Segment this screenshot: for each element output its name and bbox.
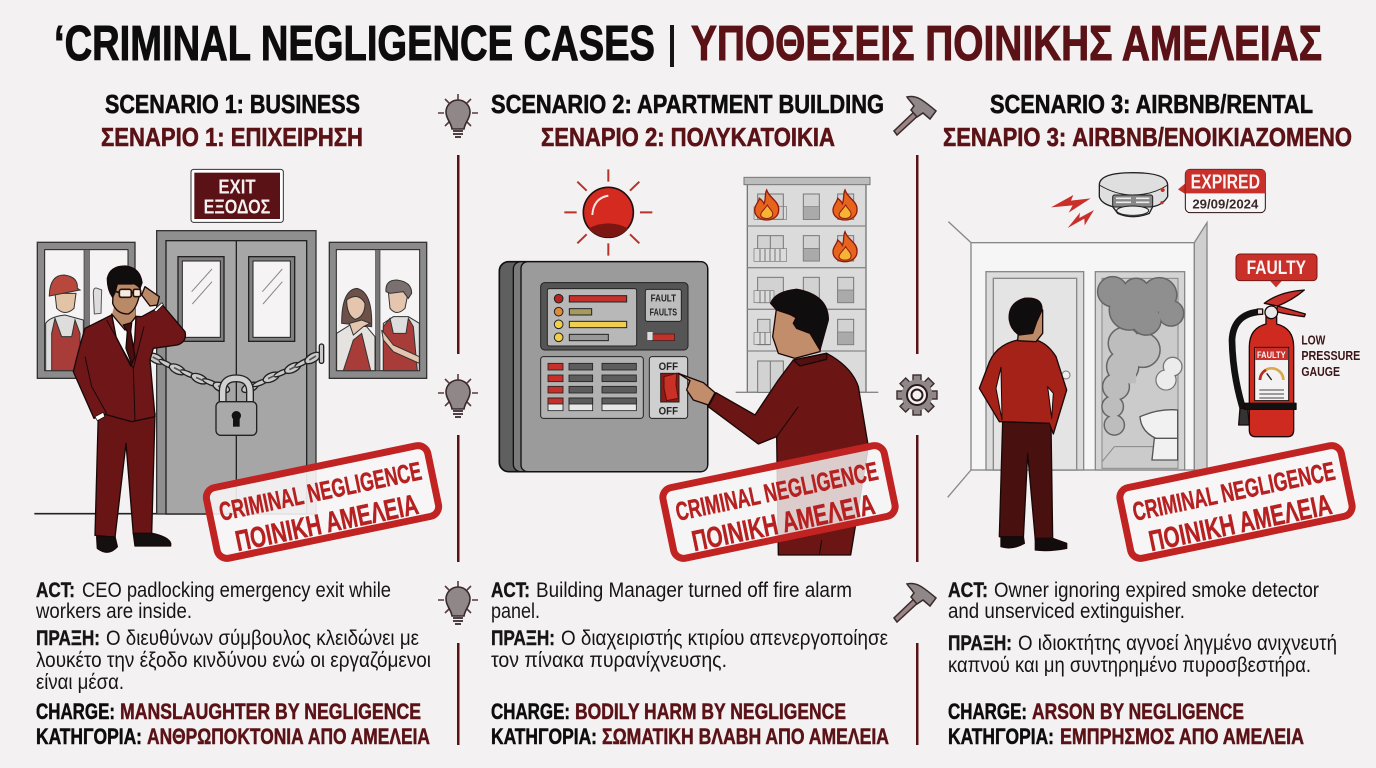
floor line: [34, 511, 157, 516]
stamp: scenario 1: ΠΟΙΝΙΚΗ ΑΜΕΛΕΙΑ: [233, 489, 421, 558]
fire alarm panel: FAULT: [651, 294, 676, 305]
text block: scenario 3 description: and unserviced extinguisher.: [948, 600, 1185, 623]
stamp: scenario 2: CRIMINAL NEGLIGENCE: [673, 456, 881, 527]
title: [54, 17, 1322, 71]
heading: scenario 1: ΣΕΝΑΡΙΟ 1: ΕΠΙΧΕΙΡΗΣΗ: [101, 122, 363, 152]
text block: scenario 2 description: ACT:: [491, 579, 530, 602]
text block: scenario 3 description: [948, 579, 1337, 677]
exit sign: [191, 169, 283, 222]
charge: scenario 2: [491, 699, 889, 749]
smoke detector: [1099, 173, 1168, 217]
fire alarm panel: OFF: [659, 361, 678, 373]
text block: scenario 3 description: ACT:: [948, 579, 988, 602]
text block: scenario 1 description: workers are inside.: [35, 600, 192, 623]
low pressure gauge label: [1301, 333, 1360, 379]
room: [948, 222, 1207, 497]
text block: scenario 3 description: Ο ιδιοκτήτης αγνοεί ληγμένο ανιχνευτή: [1018, 632, 1337, 655]
building: [736, 177, 878, 392]
text block: scenario 1 description: ACT:: [36, 579, 75, 602]
faulty callout: [1236, 254, 1317, 287]
charge: scenario 2: BODILY HARM BY NEGLIGENCE: [575, 699, 846, 724]
text block: scenario 2 description: Building Manager turned off fire alarm: [536, 579, 852, 602]
expired tag: 29/09/2024: [1192, 197, 1259, 212]
panel: scenario 2 illustration: [499, 169, 878, 555]
low pressure gauge label: GAUGE: [1301, 365, 1340, 379]
padlock: [216, 378, 257, 435]
charge: scenario 2: ΚΑΤΗΓΟΡΙΑ:: [491, 724, 597, 749]
fire alarm panel: [499, 262, 708, 472]
text block: scenario 3 description: καπνού και μη συντηρημένο πυροσβεστήρα.: [948, 654, 1311, 677]
toilet: [1140, 410, 1178, 460]
building manager: [678, 289, 868, 555]
chain link slots: [153, 356, 316, 389]
man in suit: [73, 266, 185, 552]
smoke: [1098, 277, 1184, 435]
icon: light bulb top: [438, 94, 478, 137]
text block: scenario 2 description: [491, 579, 888, 672]
panel: scenario 3 illustration: FAULTY: [1257, 350, 1286, 360]
fire alarm panel: FAULTS: [650, 307, 677, 318]
heading: scenario 3: [943, 89, 1352, 152]
charge: scenario 1: MANSLAUGHTER BY NEGLIGENCE: [120, 699, 421, 724]
heading: scenario 2: ΣΕΝΑΡΙΟ 2: ΠΟΛΥΚΑΤΟΙΚΙΑ: [541, 122, 835, 152]
text block: scenario 3 description: Owner ignoring expired smoke detector: [994, 579, 1319, 602]
stamp: scenario 2: [661, 444, 897, 562]
stamp: scenario 1: CRIMINAL NEGLIGENCE: [216, 456, 424, 527]
heading: scenario 1: [101, 89, 363, 152]
alarm light: [564, 169, 652, 256]
heading: scenario 2: SCENARIO 2: APARTMENT BUILDING: [491, 89, 884, 119]
panel: scenario 1 illustration: [34, 169, 427, 552]
charge: scenario 1: CHARGE:: [36, 699, 115, 724]
charge: scenario 3: CHARGE:: [948, 699, 1027, 724]
low pressure gauge label: PRESSURE: [1301, 349, 1360, 363]
icon: hammer bottom: [894, 584, 936, 622]
heading: scenario 3: SCENARIO 3: AIRBNB/RENTAL: [990, 89, 1313, 119]
right window with workers: [329, 242, 427, 378]
text block: scenario 3 description: ΠΡΑΞΗ:: [948, 632, 1012, 655]
text block: scenario 1 description: [35, 579, 431, 694]
exit sign: EXIT: [218, 175, 256, 198]
charge: scenario 3: ΚΑΤΗΓΟΡΙΑ:: [948, 724, 1054, 749]
heading: scenario 2: [491, 89, 884, 152]
icon: light bulb bottom: [438, 581, 478, 624]
icon: light bulb middle: [438, 374, 478, 417]
icon: hammer top: [894, 97, 936, 135]
stamp: scenario 3: [1118, 444, 1354, 562]
text block: scenario 2 description: panel.: [491, 600, 540, 623]
charge: scenario 2: CHARGE:: [491, 699, 570, 724]
text block: scenario 1 description: είναι μέσα.: [36, 671, 124, 694]
expired tag: EXPIRED: [1191, 171, 1260, 194]
faulty callout: FAULTY: [1247, 258, 1306, 279]
emergency door: [157, 231, 316, 514]
low pressure gauge label: LOW: [1301, 333, 1325, 347]
charge: scenario 1: ΚΑΤΗΓΟΡΙΑ:: [36, 724, 142, 749]
charge: scenario 1: ΑΝΘΡΩΠΟΚΤΟΝΙΑ ΑΠΟ ΑΜΕΛΕΙΑ: [147, 724, 430, 749]
stamp: scenario 1: [205, 444, 441, 562]
title: ‘CRIMINAL NEGLIGENCE CASES: [54, 17, 655, 71]
text block: scenario 1 description: λουκέτο την έξοδο κινδύνου ενώ οι εργαζόμενοι: [36, 649, 431, 672]
expired tag: [1178, 169, 1265, 213]
charge: scenario 2: ΣΩΜΑΤΙΚΗ ΒΛΑΒΗ ΑΠΟ ΑΜΕΛΕΙΑ: [602, 724, 889, 749]
left window with workers: [37, 242, 135, 378]
text block: scenario 1 description: Ο διευθύνων σύμβουλος κλειδώνει με: [106, 627, 419, 650]
sparks: [1051, 195, 1094, 228]
text block: scenario 1 description: CEO padlocking emergency exit while: [82, 579, 391, 602]
chain: [146, 344, 324, 395]
charge: scenario 3: [948, 699, 1304, 749]
fire alarm panel: OFF: [659, 406, 678, 418]
fire extinguisher: [1232, 290, 1305, 437]
stamp: scenario 2: ΠΟΙΝΙΚΗ ΑΜΕΛΕΙΑ: [689, 489, 878, 558]
flames: [755, 190, 857, 262]
text block: scenario 2 description: ΠΡΑΞΗ:: [491, 627, 555, 650]
text block: scenario 2 description: Ο διαχειριστής κτιρίου απενεργοποίησε: [561, 627, 888, 650]
icon: gear: [897, 375, 937, 415]
door handle: [1062, 371, 1070, 379]
exit sign: ΕΞΟΔΟΣ: [204, 195, 270, 218]
charge: scenario 3: ARSON BY NEGLIGENCE: [1032, 699, 1244, 724]
charge: scenario 3: ΕΜΠΡΗΣΜΟΣ ΑΠΟ ΑΜΕΛΕΙΑ: [1060, 724, 1304, 749]
heading: scenario 1: SCENARIO 1: BUSINESS: [105, 89, 360, 119]
text block: scenario 2 description: τον πίνακα πυρανίχνευσης.: [491, 649, 727, 672]
charge: scenario 1: [36, 699, 430, 749]
owner from behind: [979, 298, 1067, 551]
panel: scenario 3 illustration: [948, 169, 1360, 551]
text block: scenario 1 description: ΠΡΑΞΗ:: [36, 627, 100, 650]
